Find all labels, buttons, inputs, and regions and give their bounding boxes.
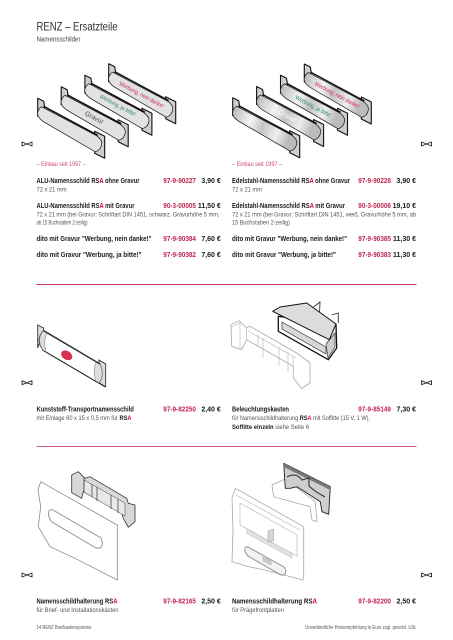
item: dito ja bitte <box>36 252 221 259</box>
box tabs <box>314 302 338 323</box>
item: Edelstahl mit Gravur <box>232 203 416 226</box>
item: Edelstahl mit Gravur: 90-3-00006 <box>358 203 391 210</box>
item: ALU mit Gravur: 11,50 € <box>198 203 221 210</box>
item: dito ja bitte: dito mit Gravur "Werbung, ja bitte!" <box>36 252 142 259</box>
item: Edelstahl ohne Gravur: 3,90 € <box>397 178 416 185</box>
item: ALU mit Gravur: ALU-Namensschild RSA mit Gravur <box>36 203 135 210</box>
item: Kunststoff transport name plate: mit Einlage 60 x 15 x 0,5 mm für RSA <box>36 415 132 422</box>
recessed bar <box>247 529 292 558</box>
item: ALU ohne Gravur: 97-9-90227 <box>163 178 196 185</box>
illustration: holder for embossed front plates <box>232 463 330 580</box>
item: holder for letter boxes: 2,50 € <box>201 598 221 606</box>
plate: Werbung ja bitte: Werbung, ja bitte! <box>294 95 332 119</box>
icon: RENZ logo <box>59 348 74 362</box>
item: Beleuchtungskasten: 97-9-85149 <box>358 406 391 414</box>
item: Kunststoff transport name plate: 2,40 € <box>201 406 221 414</box>
plate: Gravur: Gravur <box>277 109 298 125</box>
illustration: aluminium name plates <box>38 64 176 158</box>
item: dito nein danke: dito mit Gravur "Werbung, nein danke!" <box>36 236 152 243</box>
subtitle: Namensschilder <box>36 36 81 44</box>
title: RENZ – Ersatzteile <box>36 20 118 34</box>
item: Edelstahl ohne Gravur <box>232 178 416 194</box>
item: ALU ohne Gravur <box>36 178 221 194</box>
item: Edelstahl mit Gravur: 72 x 21 mm (bei Gravur: Schriftart DIN 1451, weiß, Gravurhöhe 5 mm, ab <box>232 211 416 218</box>
dark holder <box>284 463 330 514</box>
crop marks row 3 <box>22 573 432 577</box>
box lid <box>273 303 336 340</box>
item: dito ja bitte <box>232 252 416 259</box>
item: ALU mit Gravur <box>36 203 221 226</box>
item: dito ja bitte: dito mit Gravur "Werbung, ja bitte!" <box>232 252 336 259</box>
item: Kunststoff transport name plate: 97-9-82250 <box>163 406 196 414</box>
item: holder for letter boxes <box>36 598 221 614</box>
plate: Werbung nein danke: Werbung, nein danke! <box>313 81 361 110</box>
item: ALU mit Gravur: 90-3-00005 <box>163 203 196 210</box>
plate: blank <box>38 98 105 158</box>
item: Kunststoff transport name plate: Kunststoff-Transportnamensschild <box>36 406 134 414</box>
item: Beleuchtungskasten: 7,30 € <box>397 406 416 414</box>
footer: page number: 14 RENZ Briefkastensysteme <box>36 625 92 631</box>
item: ALU ohne Gravur: ALU-Namensschild RSA ohne Gravur <box>36 178 140 185</box>
section note: – Einbau seit 1997 – <box>36 161 86 168</box>
item: holder for letter boxes: für Brief- und Installationskästen <box>36 607 119 614</box>
slot <box>245 547 286 575</box>
item: Beleuchtungskasten: Beleuchtungskasten <box>232 406 289 414</box>
illustration: plastic transport name plate <box>38 325 106 387</box>
plate: blank <box>233 98 300 158</box>
item: Edelstahl mit Gravur: 19,10 € <box>393 203 416 210</box>
item: Edelstahl mit Gravur: 15 Buchstaben 2-zeilig) <box>232 220 290 226</box>
item: holder for embossed plates: für Prägefrontplatten <box>232 607 284 614</box>
item: dito nein danke: dito mit Gravur "Werbung, nein danke!" <box>232 236 347 243</box>
item: dito ja bitte: 97-9-90383 <box>358 252 391 259</box>
illustration: holder for letter boxes <box>38 472 135 580</box>
light holder <box>272 479 317 522</box>
box <box>278 316 337 360</box>
clip <box>268 529 274 542</box>
item: dito nein danke: 7,60 € <box>201 236 221 243</box>
item: holder for embossed plates <box>232 598 416 614</box>
item: dito ja bitte: 97-9-90382 <box>163 252 196 259</box>
item: dito nein danke: 97-9-90384 <box>163 236 196 243</box>
item: Edelstahl ohne Gravur: Edelstahl-Namensschild RSA ohne Gravur <box>232 178 350 185</box>
front plate <box>38 482 117 580</box>
item: ALU mit Gravur: ab 15 Buchstaben 2-zeilig) <box>36 220 88 226</box>
item: holder for embossed plates: 97-9-82200 <box>358 598 391 606</box>
item: Edelstahl mit Gravur: Edelstahl-Namensschild RSA mit Gravur <box>232 203 345 210</box>
panel: stainless steel products <box>232 161 416 259</box>
item: Edelstahl ohne Gravur: 97-9-90228 <box>358 178 391 185</box>
item: ALU mit Gravur: 72 x 21 mm (bei Gravur: Schriftart DIN 1451, schwarz, Gravurhöhe 5 mm, <box>36 211 220 218</box>
item: holder for letter boxes: Namensschildhalterung RSA <box>36 598 118 606</box>
footer: price note: Unverbindliche Preisempfehlung in Euro zzgl. gesetzl. USt. <box>305 625 417 631</box>
slot <box>48 510 102 548</box>
front plate <box>232 488 304 580</box>
plate: Gravur: Gravur <box>83 110 105 126</box>
plate: Werbung ja bitte: Werbung, ja bitte! <box>98 94 137 118</box>
item: Beleuchtungskasten: für Namensschildhalterung RSA mit Soffitte (15 V, 1 W), <box>232 415 370 422</box>
illustration: stainless steel name plates <box>233 64 371 158</box>
holder outline <box>231 321 310 389</box>
item: holder for embossed plates: Namensschildhalterung RSA <box>232 598 317 606</box>
item: Kunststoff transport name plate <box>36 406 221 422</box>
item: Beleuchtungskasten <box>232 406 416 431</box>
illustration: light box <box>231 302 338 389</box>
crop marks row 1 <box>22 142 432 146</box>
item: ALU ohne Gravur: 3,90 € <box>201 178 221 185</box>
plate: Werbung nein danke: Werbung, nein danke! <box>118 81 165 110</box>
item: dito nein danke: 97-9-90385 <box>358 236 391 243</box>
item: ALU ohne Gravur: 72 x 21 mm <box>36 187 67 194</box>
item: holder for embossed plates: 2,50 € <box>397 598 416 606</box>
holder <box>72 472 135 527</box>
item: Beleuchtungskasten: Soffitte einzeln siehe Seite 6 <box>232 424 309 431</box>
item: Edelstahl ohne Gravur: 72 x 21 mm <box>232 187 262 194</box>
item: dito ja bitte: 7,60 € <box>201 252 221 259</box>
crop marks row 2 <box>22 380 432 385</box>
section note: – Einbau seit 1997 – <box>232 161 282 168</box>
item: holder for letter boxes: 97-9-82165 <box>163 598 196 606</box>
item: dito nein danke: 11,30 € <box>393 236 416 243</box>
item: dito ja bitte: 11,30 € <box>393 252 416 259</box>
panel: aluminium products <box>36 161 221 259</box>
